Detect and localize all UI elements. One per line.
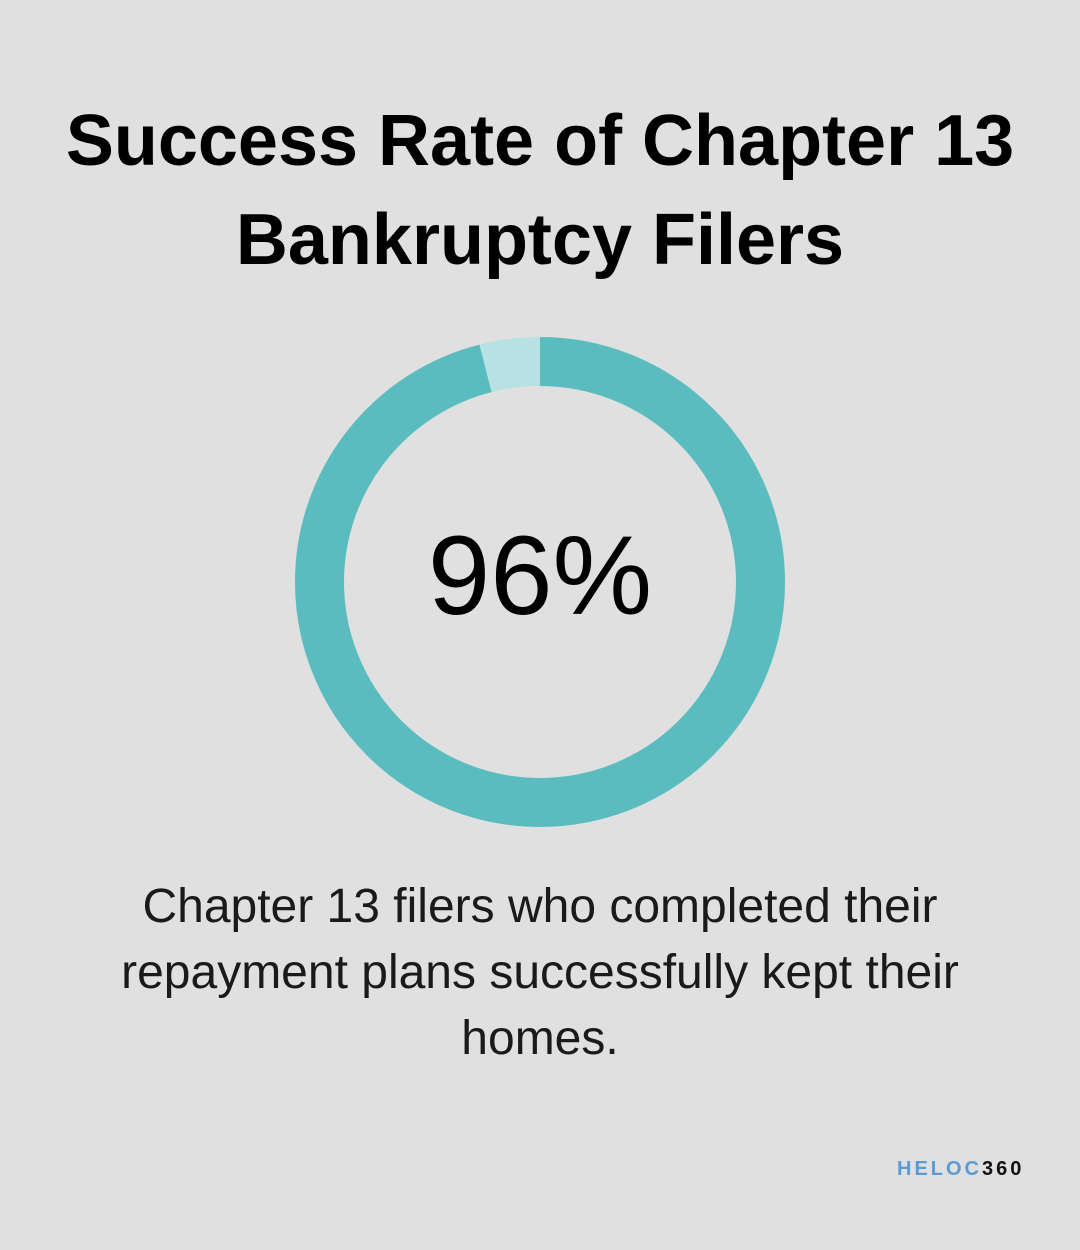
title: Success Rate of Chapter 13 <box>66 101 1014 181</box>
donut chart: 96% <box>428 513 652 638</box>
description text: Chapter 13 filers who completed their repayment plans successfully kept their homes. <box>121 880 959 1065</box>
logo: HELOC360 <box>897 1158 1024 1180</box>
title <box>66 101 1014 280</box>
title: Bankruptcy Filers <box>236 200 844 280</box>
